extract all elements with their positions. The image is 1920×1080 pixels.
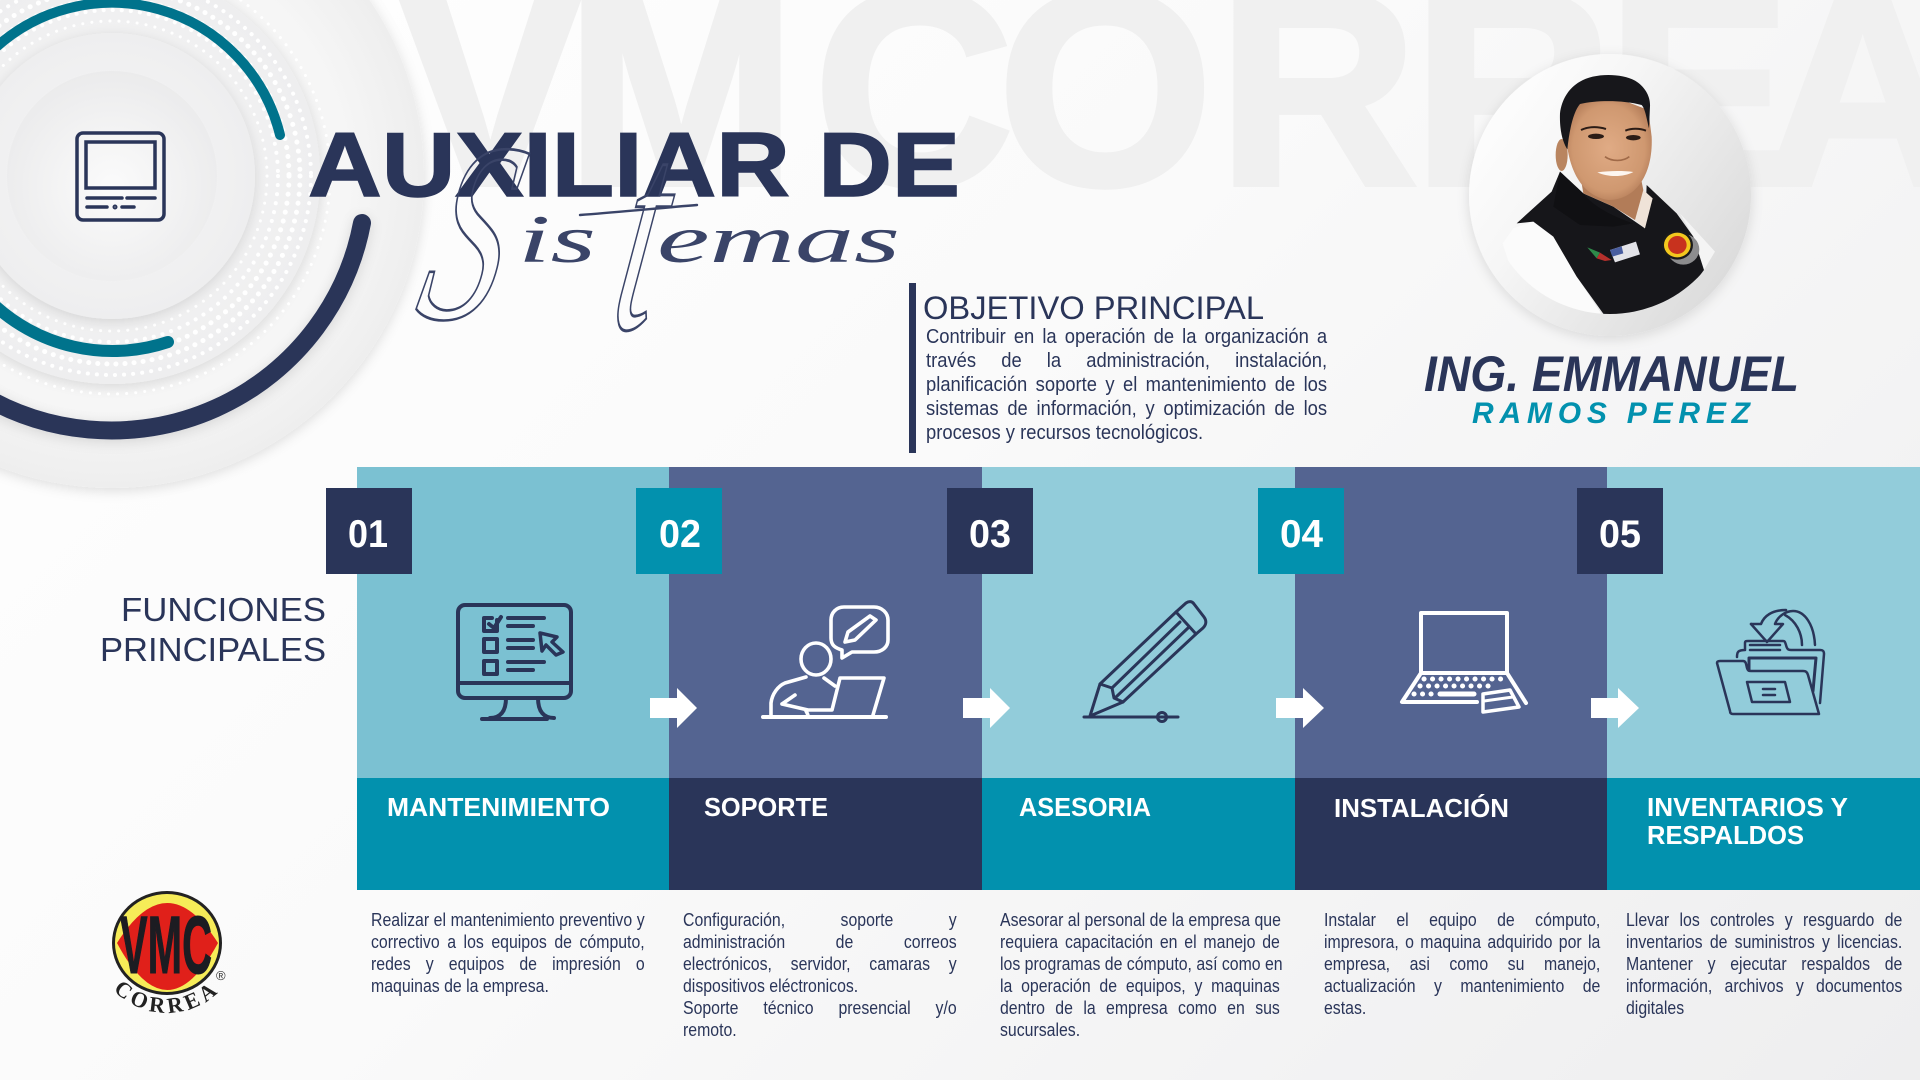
band 4: INSTALACIÓN: INSTALACIÓN: [1334, 793, 1509, 823]
objective paragraph: procesos y recursos tecnológicos.: [926, 422, 1203, 444]
band 1: MANTENIMIENTO: [357, 778, 669, 890]
description: asesoria: Asesorar al personal de la empresa que: [1000, 910, 1281, 930]
objective bar: [909, 283, 916, 453]
band 5: INVENTARIOS Y RESPALDOS: INVENTARIOS Y: [1647, 792, 1848, 822]
portrait photo: [1469, 54, 1751, 336]
objective paragraph: sistemas de información, y optimización de los: [926, 398, 1327, 420]
arrow 3: [1276, 688, 1324, 728]
description: inventarios: digitales: [1626, 998, 1684, 1018]
heading: FUNCIONES PRINCIPALES: [100, 591, 326, 668]
description: inventarios: Llevar los controles y resguardo de: [1626, 910, 1902, 930]
description: instalacion: empresa, asi como su manejo,: [1324, 954, 1600, 974]
heading: FUNCIONES PRINCIPALES: PRINCIPALES: [100, 631, 326, 668]
panel: column 1 background: [357, 467, 669, 778]
heading: FUNCIONES PRINCIPALES: FUNCIONES: [121, 591, 326, 628]
arrow 2: [963, 688, 1010, 728]
objective paragraph: Contribuir en la operación de la organización a: [926, 326, 1327, 348]
number badge 03: [947, 488, 1033, 574]
icon: person with laptop and speech bubble: [763, 607, 888, 717]
description: inventarios: inventarios de suministros y licencias.: [1626, 932, 1902, 952]
title script: Sistemas: emas: [657, 201, 900, 277]
logo: VMC Correa: VMC: [120, 900, 212, 991]
description: mantenimiento: maquinas de la empresa.: [371, 976, 549, 996]
description: soporte: Soporte técnico presencial y/o: [683, 998, 957, 1018]
decorative concentric circles with arcs: [0, 0, 424, 488]
icon: tablet screen: [77, 133, 164, 220]
description: soporte: dispositivos eléctronicos.: [683, 976, 858, 996]
band 3: ASESORIA: ASESORIA: [1019, 792, 1151, 822]
description: instalacion: impresora, o maquina adquirido por la: [1324, 932, 1600, 952]
icon: laptop with card: [1402, 613, 1526, 712]
panel: column 4 background: [1295, 467, 1607, 778]
description: inventarios: información, archivos y documentos: [1626, 976, 1902, 996]
description: instalacion: actualización y mantenimiento de: [1324, 976, 1600, 996]
title script: Sistemas: [398, 71, 900, 392]
objective paragraph: [926, 326, 1328, 444]
description: asesoria: sucursales.: [1000, 1020, 1080, 1040]
band 5: INVENTARIOS Y RESPALDOS: [1607, 778, 1920, 890]
arrow 1: [650, 688, 697, 728]
icon: folder with download arrow: [1717, 610, 1824, 714]
title script: Sistemas: t: [597, 71, 697, 392]
panel: column 3 background: [982, 467, 1295, 778]
logo: VMC Correa: CORREA: [116, 982, 218, 1014]
band 2: SOPORTE: [669, 778, 982, 890]
description: inventarios: [1626, 910, 1902, 1018]
heading: OBJETIVO PRINCIPAL: OBJETIVO PRINCIPAL: [923, 290, 1264, 326]
title script: Sistemas: S: [398, 91, 548, 373]
description: asesoria: los programas de cómputo, así como en: [1000, 954, 1283, 974]
description: soporte: electrónicos, servidor, camaras y: [683, 954, 957, 974]
number badge 03: 03: [969, 513, 1011, 556]
description: soporte: remoto.: [683, 1020, 737, 1040]
number badge 04: [1258, 488, 1344, 574]
number badge 05: [1577, 488, 1663, 574]
logo: VMC Correa: [112, 891, 226, 1014]
panel: column 2 background: [669, 467, 982, 778]
band 2: SOPORTE: SOPORTE: [704, 792, 828, 822]
description: instalacion: estas.: [1324, 998, 1366, 1018]
title: AUXILIAR DE: AUXILIAR DE: [308, 115, 960, 216]
panel: column 5 background: [1607, 467, 1920, 778]
description: asesoria: dentro de la empresa como en sus: [1000, 998, 1280, 1018]
icon: pencil: [1084, 602, 1206, 722]
band 5: INVENTARIOS Y RESPALDOS: RESPALDOS: [1647, 820, 1804, 850]
number badge 01: 01: [348, 513, 388, 556]
description: mantenimiento: Realizar el mantenimiento preventivo y: [371, 910, 645, 930]
band 4: INSTALACIÓN: [1295, 778, 1607, 890]
number badge 04: 04: [1280, 513, 1323, 556]
number badge 02: 02: [659, 513, 701, 556]
title script: Sistemas: is: [518, 201, 596, 277]
description: mantenimiento: [371, 910, 645, 996]
description: mantenimiento: redes y equipos de impresión o: [371, 954, 645, 974]
objective paragraph: planificación soporte y el mantenimiento de los: [926, 374, 1327, 396]
name: ING. EMMANUEL: ING. EMMANUEL: [1424, 346, 1799, 402]
description: mantenimiento: correctivo a los equipos de cómputo,: [371, 932, 645, 952]
logo: VMC Correa: ®: [216, 968, 226, 983]
description: asesoria: la operación de equipos, y maquinas: [1000, 976, 1280, 996]
band 3: ASESORIA: [982, 778, 1295, 890]
description: asesoria: requiera capacitación en el manejo de: [1000, 932, 1280, 952]
description: instalacion: Instalar el equipo de cómputo,: [1324, 910, 1600, 930]
arrow 4: [1591, 688, 1639, 728]
description: instalacion: [1324, 910, 1600, 1018]
description: asesoria: [1000, 910, 1283, 1040]
number badge 05: 05: [1599, 513, 1641, 556]
name: RAMOS PEREZ: RAMOS PEREZ: [1472, 397, 1752, 430]
watermark: VMCORREA: [398, 0, 1920, 243]
band 1: MANTENIMIENTO: MANTENIMIENTO: [387, 792, 610, 822]
description: inventarios: Mantener y ejecutar respaldos de: [1626, 954, 1902, 974]
description: soporte: administración de correos: [683, 932, 957, 952]
objective paragraph: través de la administración, instalación,: [926, 350, 1327, 372]
description: soporte: Configuración, soporte y: [683, 910, 957, 930]
icon: monitor with checklist: [458, 605, 571, 719]
description: soporte: [683, 910, 957, 1040]
number badge 01: [326, 488, 412, 574]
number badge 02: [636, 488, 722, 574]
